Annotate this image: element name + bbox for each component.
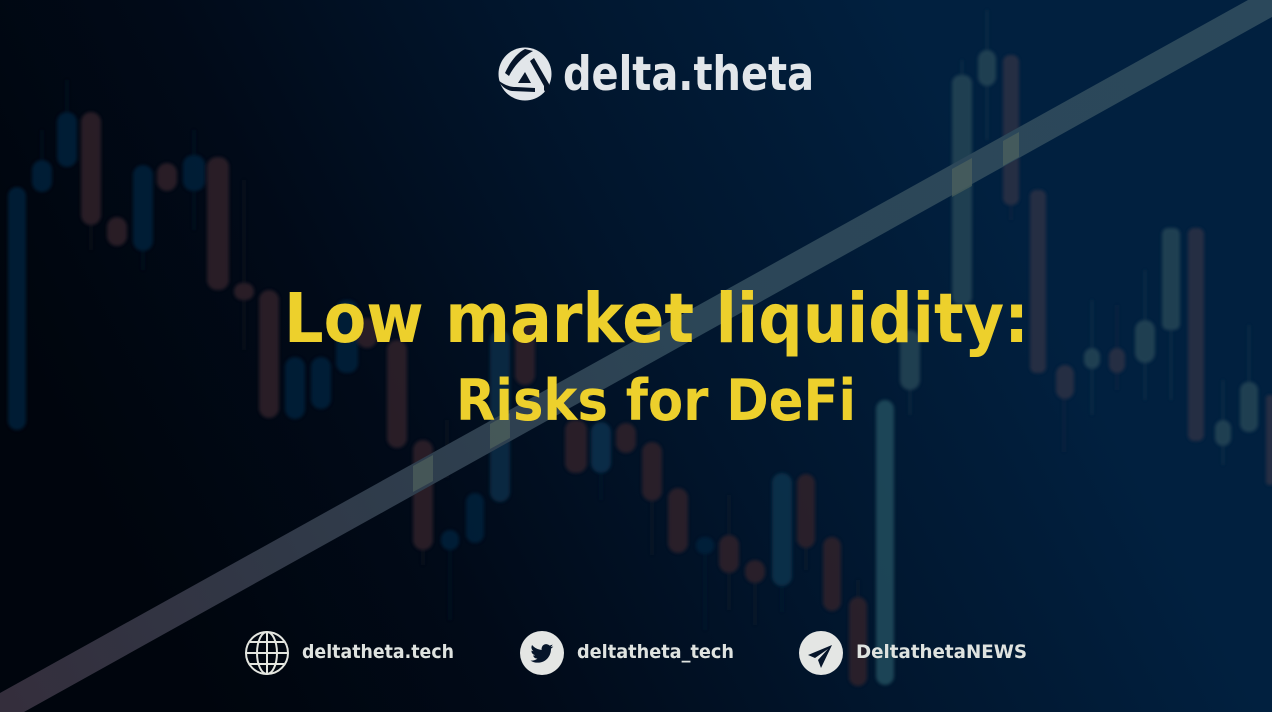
footer links	[246, 631, 1027, 675]
icon: twitter	[520, 631, 564, 675]
bright candles: right	[876, 50, 1258, 685]
subtitle: Risks for DeFi	[456, 368, 856, 434]
icon: globe	[246, 632, 288, 674]
blue candles: left, dim	[8, 112, 792, 586]
website link: deltatheta.tech	[302, 641, 454, 663]
telegram link: DeltathetaNEWS	[856, 641, 1027, 663]
red candles: right	[1003, 55, 1272, 485]
icon: delta.theta triangle mark	[498, 48, 552, 100]
icon: telegram	[799, 631, 843, 675]
logo	[498, 47, 814, 102]
twitter link: deltatheta_tech	[577, 641, 734, 663]
red candles: left and centre, dim	[81, 112, 867, 686]
band and candle crossings	[413, 132, 1019, 492]
title: Low market liquidity:	[284, 279, 1029, 359]
logo wordmark: delta.theta	[563, 47, 814, 102]
